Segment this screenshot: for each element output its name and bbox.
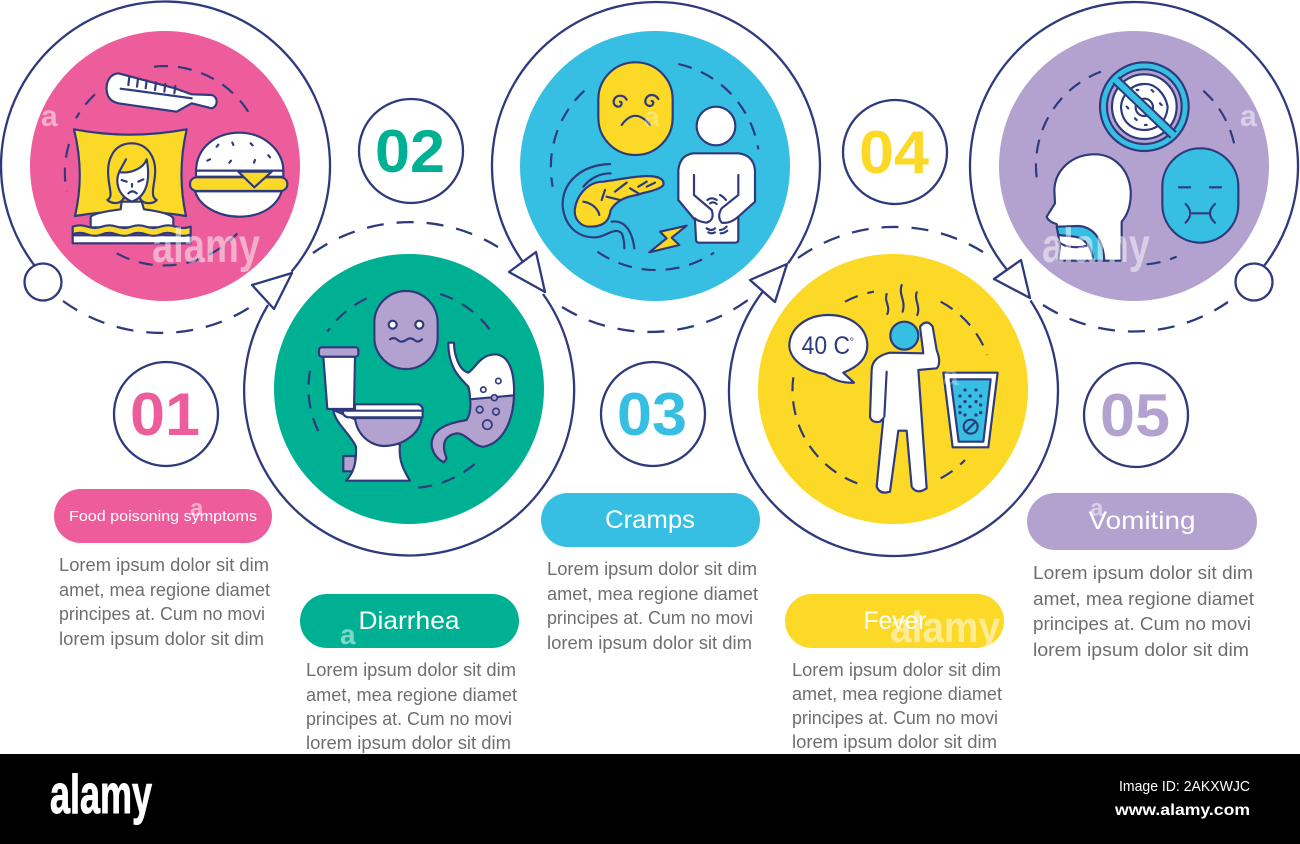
stock watermarks: [41, 100, 1257, 652]
text block 3: Lorem ipsum dolor sit dim: [547, 559, 757, 579]
icons: no food sign, throat profile, queasy face: [1036, 62, 1238, 264]
stock watermarks: alamy: [1042, 220, 1150, 273]
heading pill 5: Vomiting: [1088, 507, 1196, 535]
text block 2: lorem ipsum dolor sit dim: [306, 733, 511, 753]
icons: thermometer, sick woman, burger: [65, 66, 287, 265]
text block 5: principes at. Cum no movi: [1033, 614, 1251, 634]
text block 3: amet, mea regione diamet: [547, 584, 758, 604]
icons: speech bubble, feverish person, glass: [789, 285, 998, 493]
stock watermarks: a: [41, 100, 58, 133]
text block 4: Lorem ipsum dolor sit dim: [792, 660, 1001, 680]
text block 4: principes at. Cum no movi: [792, 708, 998, 728]
stock watermarks: a: [340, 619, 356, 650]
number 05: 05: [1100, 382, 1170, 449]
arrow head 2: [509, 252, 545, 292]
panel: step 1 circle: [1, 2, 330, 333]
heading pill 2: Diarrhea: [358, 607, 460, 635]
arrow head 4: [994, 260, 1030, 298]
number 04: 04: [859, 119, 930, 186]
number 04: [843, 100, 947, 204]
heading pill 1: Food poisoning symptoms: [69, 508, 257, 525]
number 02: 02: [375, 118, 445, 185]
heading pill 4: Fever: [864, 607, 926, 635]
text block 1: amet, mea regione diamet: [59, 580, 270, 600]
stock watermarks: a: [1240, 100, 1257, 133]
stock watermarks: a: [943, 360, 959, 391]
stock watermarks: a: [644, 101, 660, 132]
text block 2: Lorem ipsum dolor sit dim: [306, 660, 516, 680]
text block 4: lorem ipsum dolor sit dim: [792, 732, 997, 752]
footer band: [0, 754, 1300, 844]
text block 5: [1033, 563, 1254, 660]
panel: step 2 circle: [244, 222, 574, 555]
text block 4: amet, mea regione diamet: [792, 684, 1002, 704]
website: www.alamy.com: [1114, 802, 1250, 819]
text block 3: lorem ipsum dolor sit dim: [547, 633, 752, 653]
text block 1: [59, 555, 270, 649]
stock watermarks: alamy: [152, 220, 260, 273]
number 02: [359, 99, 463, 203]
text block 1: Lorem ipsum dolor sit dim: [59, 555, 269, 575]
end node: [1236, 264, 1272, 300]
icons: dizzy face, pancreas, person with cramps: [551, 62, 758, 270]
heading pill 3: [541, 493, 760, 547]
text block 2: [306, 660, 517, 753]
image id: Image ID: 2AKXWJC: [1119, 778, 1250, 795]
text block 1: lorem ipsum dolor sit dim: [59, 629, 264, 649]
number 01: 01: [130, 381, 200, 448]
text block 3: principes at. Cum no movi: [547, 608, 753, 628]
text block 2: principes at. Cum no movi: [306, 709, 512, 729]
text block 5: amet, mea regione diamet: [1033, 589, 1254, 609]
panel: step 4 circle: [729, 227, 1058, 556]
text block 4: [792, 660, 1002, 752]
stock watermarks: alamy: [890, 603, 1000, 652]
text block 1: principes at. Cum no movi: [59, 604, 265, 624]
icons: speech bubble, feverish person, glass: 40 C: [802, 332, 850, 360]
number 01: [114, 362, 218, 466]
number 03: 03: [617, 381, 687, 448]
text block 2: amet, mea regione diamet: [306, 685, 517, 705]
start node: [24, 264, 62, 300]
stock watermarks: a: [190, 495, 204, 522]
arrow head 1: [252, 273, 292, 309]
icons: speech bubble, feverish person, glass: °: [849, 334, 854, 348]
number 03: [601, 362, 705, 466]
panel: step 5 circle: [970, 2, 1298, 331]
heading pill 5: [1027, 493, 1257, 550]
text block 5: lorem ipsum dolor sit dim: [1033, 640, 1249, 660]
icons: nauseous face, toilet, stomach: [308, 291, 514, 488]
heading pill 1: [54, 489, 272, 543]
text block 3: [547, 559, 758, 653]
number 05: [1084, 363, 1188, 467]
heading pill 4: [785, 594, 1004, 648]
heading pill 3: Cramps: [605, 506, 695, 534]
panel: step 3 circle: [492, 2, 820, 332]
arrow head 3: [750, 264, 787, 302]
heading pill 2: [300, 594, 519, 648]
text block 5: Lorem ipsum dolor sit dim: [1033, 563, 1253, 583]
stock watermarks: a: [1090, 495, 1104, 522]
footer logo: alamy: [50, 763, 152, 825]
